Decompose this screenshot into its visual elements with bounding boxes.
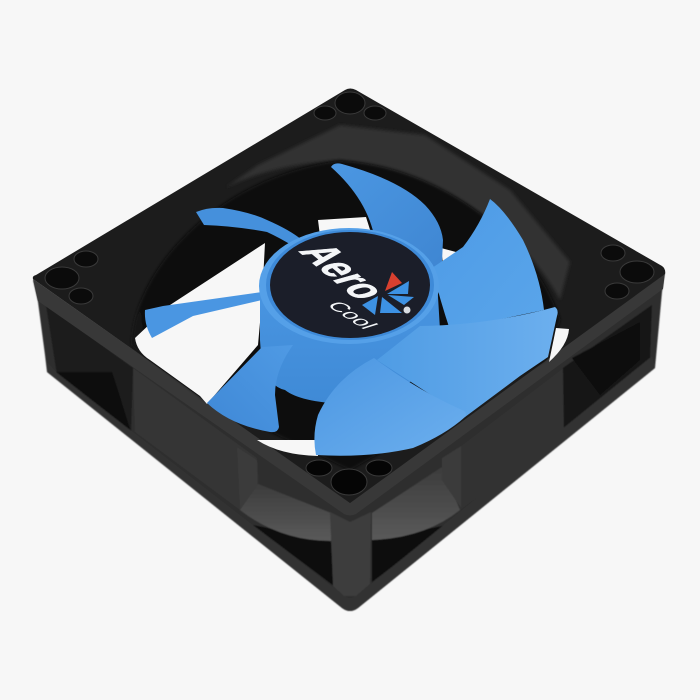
holes: bottom corner: [306, 460, 392, 495]
top face: [33, 88, 665, 503]
hub rim: [259, 228, 439, 344]
opening: right lower: [549, 328, 569, 362]
blade: lower left: [207, 345, 293, 432]
hub label: [270, 232, 430, 338]
inner shroud: [132, 161, 560, 470]
hub: [259, 228, 439, 344]
frame side walls: [33, 272, 665, 611]
opening: lower: [257, 440, 318, 456]
left bottom vent: [237, 447, 334, 586]
blade: top: [331, 163, 443, 270]
top face rim front: [33, 272, 665, 516]
blade: right lower: [377, 307, 558, 417]
hub side: [260, 280, 440, 404]
corner post: [330, 512, 371, 596]
right face solid section: [460, 367, 565, 510]
lower flange: [47, 356, 655, 611]
holes: left corner: [45, 251, 98, 304]
right corner vent: [563, 305, 652, 432]
opening: right upper: [441, 248, 456, 264]
blade: big right: [432, 199, 544, 330]
right bottom vent: [372, 446, 461, 582]
left face solid section: [133, 368, 257, 510]
opening: left: [135, 243, 265, 404]
upper shroud highlight: [225, 125, 570, 300]
logo word: Aero: Aero: [288, 240, 399, 304]
left corner vent: [46, 305, 133, 432]
logo word: Cool: Cool: [321, 299, 383, 331]
blade: thin left: [145, 292, 262, 338]
hub rim inner: [266, 230, 434, 340]
opening: top: [318, 217, 372, 236]
holes: right corner: [601, 245, 654, 299]
logo mark: [362, 272, 414, 315]
blade: thin upper left: [196, 208, 302, 246]
blade: front: [314, 358, 466, 456]
holes: top corner: [314, 92, 386, 120]
